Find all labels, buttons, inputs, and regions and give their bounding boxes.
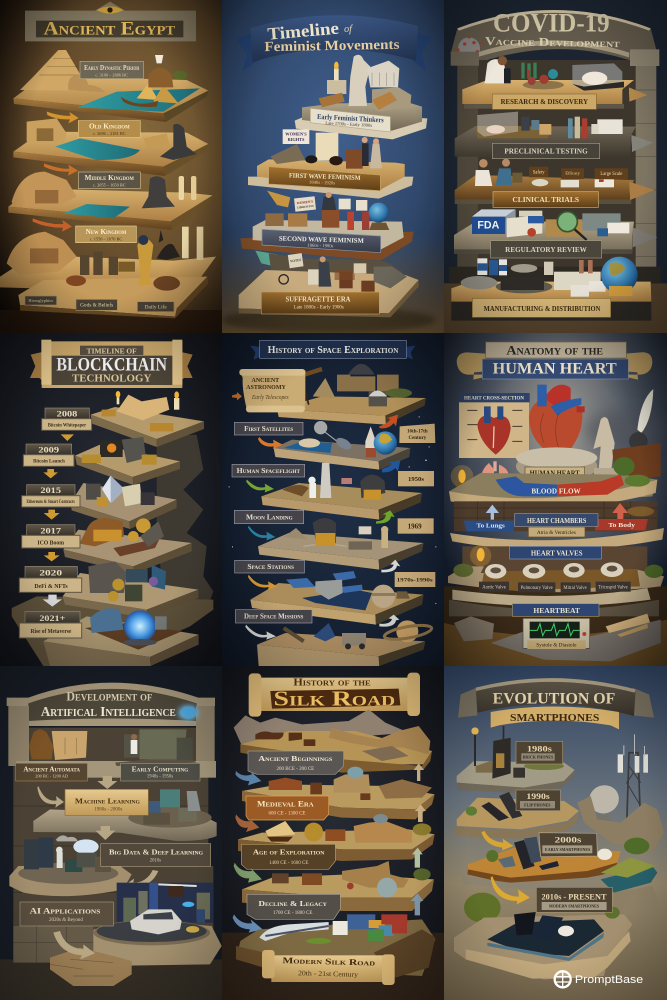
shelf: Regulatory Review: FDA bbox=[477, 220, 500, 232]
tier: Early Dynastic Period bbox=[13, 50, 208, 122]
tier: AI Applications bbox=[13, 883, 222, 986]
label: Research & Discovery bbox=[492, 94, 596, 109]
label: Moon Landing: Moon Landing bbox=[246, 512, 293, 521]
plate: Second Wave Feminism: SECOND WAVE FEMINISM bbox=[279, 236, 365, 245]
plate: Suffragette Era: Late 1800s - Early 1900s bbox=[294, 306, 344, 311]
label: AI Applications: 2020s & Beyond bbox=[49, 918, 83, 923]
label: Daily Life: Daily Life bbox=[145, 304, 167, 311]
label: 1990s Flip Phones: 1990s bbox=[526, 792, 551, 801]
plaque: New Kingdom bbox=[76, 226, 136, 243]
label: Age of Exploration bbox=[241, 844, 335, 869]
tier: Machine Learning bbox=[33, 789, 217, 841]
tier: 2020 DeFi & NFTs bbox=[63, 561, 198, 618]
tier: 2010s to present bbox=[454, 907, 632, 979]
tier: 2015 Ethereum bbox=[71, 476, 177, 529]
label: 1980s Brick Phones: 1980s bbox=[527, 743, 553, 753]
tier: Middle Kingdom bbox=[8, 172, 213, 230]
milestone: 2021+: Rise of Metaverse bbox=[31, 629, 72, 635]
scroll: Machine Learning bbox=[65, 789, 148, 815]
title ribbon: Feminist Movements bbox=[264, 38, 400, 55]
tag: 1969 bbox=[398, 518, 434, 534]
tier: Ancient Beginnings bbox=[234, 709, 432, 773]
arrow: blue curve 1 bbox=[235, 771, 261, 785]
plaque: Early Dynastic Period: Early Dynastic Period bbox=[84, 63, 139, 72]
monitor: heartbeat bbox=[523, 618, 590, 649]
title banner: BLOCKCHAIN bbox=[56, 354, 167, 375]
icon: heart bbox=[529, 385, 585, 459]
sign: votes for women bbox=[288, 253, 304, 268]
label: Space Stations bbox=[235, 560, 304, 573]
ribbon: To Lungs: To Lungs bbox=[476, 523, 505, 530]
arrows: gold curved bbox=[481, 831, 530, 904]
milestone: 2009: Bitcoin Launch bbox=[33, 459, 65, 464]
plaque: Old Kingdom: Old Kingdom bbox=[89, 122, 130, 131]
label: Mitral Valve: Mitral Valve bbox=[563, 586, 587, 591]
rocks right bbox=[614, 886, 659, 914]
title ribbon bbox=[235, 15, 432, 72]
label: Big Data & Deep Learning: 2010s bbox=[150, 858, 161, 863]
tier: Early Feminist Thinkers bbox=[295, 55, 427, 139]
label: Heart Valves bbox=[510, 546, 601, 559]
arrow: white right 1 bbox=[381, 560, 400, 572]
pedestal: Human Heart bbox=[516, 447, 597, 481]
arch title: Development of bbox=[66, 690, 153, 704]
plate: Suffragette Era bbox=[261, 292, 379, 314]
arrow: orange curve bbox=[258, 437, 283, 449]
label: Pulmonary Valve bbox=[518, 582, 555, 592]
arrow: tan right 2 bbox=[629, 182, 655, 200]
label: Heart Valves: HEART VALVES bbox=[531, 550, 583, 558]
milestone: 2020 bbox=[19, 566, 82, 592]
tier: First Wave Feminism bbox=[248, 129, 413, 199]
label: Early Computing: Early Computing bbox=[132, 765, 188, 773]
arrow: grey right 1 bbox=[631, 135, 653, 152]
label: Tricuspid Valve bbox=[596, 582, 631, 592]
milestone: 2015: Ethereum & Smart Contracts bbox=[26, 500, 75, 505]
milestone: 2021+ bbox=[19, 611, 82, 638]
plaque: Middle Kingdom: Middle Kingdom bbox=[85, 173, 134, 182]
scroll: ancient astronomy: ASTRONOMY bbox=[246, 385, 286, 391]
plate: Suffragette Era: SUFFRAGETTE ERA bbox=[286, 296, 350, 304]
arrow: white curve bbox=[245, 625, 276, 640]
title: Evolution of Smartphones: SMARTPHONES bbox=[510, 713, 600, 724]
label: Human Spaceflight: Human Spaceflight bbox=[237, 466, 301, 475]
arrow: grey right 2 bbox=[633, 227, 657, 247]
tier: 2017 ICO Boom bbox=[63, 518, 192, 574]
arrow: 2015 to 2017 bbox=[44, 510, 60, 520]
scroll: Modern Silk Road bbox=[262, 950, 395, 985]
bottom slab base bbox=[12, 596, 213, 666]
arch title: COVID-19 Vaccine Development: COVID-19 bbox=[493, 8, 610, 37]
lungs bbox=[481, 461, 510, 483]
tag: 1950s: 1950s bbox=[408, 476, 424, 483]
tier: Blood Flow: BLOOD FLOW bbox=[531, 487, 581, 496]
label: Heartbeat: HEARTBEAT bbox=[533, 607, 580, 615]
panel: COVID-19 Vaccine Development bbox=[444, 0, 667, 333]
milestone: 2008: Bitcoin Whitepaper bbox=[48, 423, 87, 428]
arrow: orange bbox=[44, 163, 78, 176]
tier: 2009 Bitcoin Launch bbox=[75, 437, 180, 485]
label: Clinical Trials bbox=[493, 192, 598, 207]
panel: History of the Silk Road bbox=[222, 666, 444, 1000]
label: Mitral Valve bbox=[561, 582, 591, 592]
label: Hieroglyphics: Hieroglyphics bbox=[28, 298, 53, 303]
rocks and scrolls bbox=[454, 614, 661, 661]
plate: Second Wave Feminism bbox=[262, 229, 381, 253]
shelf: Clinical Trials: Safety bbox=[533, 170, 545, 175]
ledge: automata and computing bbox=[16, 729, 216, 778]
shelf: Preclinical Testing bbox=[455, 112, 636, 157]
label: First Satellites: First Satellites bbox=[244, 424, 293, 433]
title: Evolution of Smartphones: EVOLUTION OF bbox=[493, 690, 615, 707]
title banner: TECHNOLOGY bbox=[72, 374, 152, 385]
shelf: Clinical Trials: Large Scale bbox=[600, 172, 622, 177]
arrow: green right bbox=[376, 510, 395, 524]
label: Manufacturing & Distribution bbox=[472, 298, 611, 317]
arrow: teal curve bbox=[248, 526, 275, 540]
tier: New Kingdom bbox=[0, 227, 216, 318]
label: Medieval Era: 600 CE - 1300 CE bbox=[269, 811, 305, 816]
arrow: 2009 to 2015 bbox=[43, 469, 58, 478]
label: Heart Chambers: HEART CHAMBERS bbox=[527, 517, 586, 525]
label: 1980s Brick Phones: BRICK PHONES bbox=[523, 755, 554, 760]
tier: space stations bbox=[250, 571, 424, 625]
arrow: 2008 to 2009 bbox=[61, 434, 74, 441]
tag: 1970s-1990s bbox=[395, 572, 435, 587]
milestone: 2009: 2009 bbox=[38, 444, 60, 454]
tier: Medieval Era bbox=[242, 767, 435, 819]
logo: PromptBase bbox=[555, 971, 643, 987]
tier: moon landing bbox=[258, 518, 424, 570]
milestone: 2009 bbox=[23, 444, 74, 466]
plaque: New Kingdom: New Kingdom bbox=[86, 227, 127, 236]
tier: first satellites bbox=[274, 421, 410, 470]
title banner bbox=[30, 340, 193, 388]
panel: Anatomy of the Human Heart bbox=[444, 333, 667, 666]
ribbon: To Body: To Body bbox=[608, 522, 636, 529]
title plaque: Ancient Egypt: Ancient Egypt bbox=[44, 19, 176, 40]
tier: 2021+ Rise of Metaverse bbox=[43, 608, 199, 666]
title: Evolution of Smartphones bbox=[458, 678, 654, 729]
cross-section chart bbox=[459, 393, 530, 458]
tag: 16th-17th Century: 16th-17th bbox=[407, 429, 428, 434]
tier: deep space missions bbox=[257, 620, 433, 666]
label: Preclinical Testing: PRECLINICAL TESTING bbox=[504, 146, 588, 155]
arrow: first wave down bbox=[267, 191, 290, 207]
title: Anatomy of the Human Heart bbox=[457, 342, 652, 380]
panel: Timeline of Blockchain Technology bbox=[0, 333, 222, 666]
tier: 2008 Bitcoin Whitepaper bbox=[91, 391, 204, 447]
label: 2010s - Present Modern Smartphones: MODERN SMARTPHONES bbox=[549, 904, 600, 909]
cross-section chart: HEART CROSS-SECTION bbox=[464, 397, 525, 402]
scroll: Modern Silk Road: 20th - 21st Century bbox=[298, 969, 359, 979]
arrows: tall up arrows bbox=[411, 763, 426, 915]
label: Pulmonary Valve: Pulmonary Valve bbox=[521, 586, 553, 591]
label: Ancient Automata: 200 BC - 1200 AD bbox=[35, 774, 68, 779]
label: Deep Space Missions bbox=[235, 610, 312, 623]
plate: Early Feminist Thinkers: Early Feminist Thinkers bbox=[317, 112, 384, 124]
tier: Decline & Legacy bbox=[242, 861, 434, 911]
label: Human Spaceflight bbox=[232, 464, 305, 477]
label: 1990s Flip Phones bbox=[516, 790, 560, 811]
milestone: 2017: 2017 bbox=[40, 525, 62, 535]
label: Ancient Beginnings: 200 BCE - 200 CE bbox=[276, 767, 314, 772]
tier: Old Kingdom bbox=[13, 118, 208, 176]
cell tower and dish bbox=[577, 734, 664, 853]
plaque: Middle Kingdom bbox=[78, 172, 140, 189]
label: Deep Space Missions: Deep Space Missions bbox=[244, 612, 304, 621]
milestone: 2021+: 2021+ bbox=[39, 613, 65, 623]
scroll: Machine Learning: 1980s - 2000s bbox=[94, 808, 122, 813]
milestone: 2017: ICO Boom bbox=[37, 539, 64, 546]
ribbon: To Lungs bbox=[463, 521, 514, 531]
logo: PromptBase: PromptBase bbox=[575, 974, 643, 986]
label: First Satellites bbox=[234, 422, 303, 435]
shelf: Manufacturing & Distribution bbox=[451, 257, 651, 321]
sign: Women's Rights bbox=[283, 129, 309, 144]
label: Ancient Automata bbox=[16, 763, 87, 781]
title scroll: Silk Road bbox=[274, 686, 395, 710]
title banner: TIMELINE OF bbox=[87, 346, 137, 355]
title plaque: Ancient Egypt bbox=[25, 2, 196, 41]
label: Daily Life bbox=[137, 302, 174, 312]
plate: First Wave Feminism: FIRST WAVE FEMINISM bbox=[289, 172, 361, 182]
stone wall backing bbox=[13, 728, 213, 959]
candle left bbox=[451, 465, 473, 488]
label: Big Data & Deep Learning: Big Data & Deep Learning bbox=[109, 847, 203, 856]
plate: First Wave Feminism bbox=[269, 167, 380, 191]
title banner: History of Space Exploration bbox=[268, 345, 398, 356]
milestone: 2020: 2020 bbox=[39, 568, 62, 578]
tier: Second Wave Feminism bbox=[240, 192, 414, 261]
tag: 16th-17th Century bbox=[399, 424, 435, 443]
arch title: COVID-19 Vaccine Development: Vaccine Development bbox=[485, 34, 621, 50]
plate: Second Wave Feminism: 1960s - 1980s bbox=[307, 244, 334, 249]
shelf: Research & Discovery bbox=[462, 56, 634, 109]
tier: Modern Silk Road bbox=[236, 914, 435, 978]
label: Regulatory Review: REGULATORY REVIEW bbox=[505, 245, 587, 254]
label: Big Data & Deep Learning bbox=[101, 844, 211, 866]
milestone: 2015: 2015 bbox=[40, 485, 62, 495]
milestone: 2020: DeFi & NFTs bbox=[34, 583, 68, 590]
arrow: down 2 bbox=[95, 826, 115, 840]
pedestal: Human Heart: HUMAN HEART bbox=[530, 470, 580, 478]
label: 2000s Early Smartphones bbox=[539, 833, 597, 857]
label: 1990s Flip Phones: FLIP PHONES bbox=[524, 802, 551, 807]
tier: Heart Chambers bbox=[450, 501, 664, 550]
scroll: Machine Learning: Machine Learning bbox=[75, 796, 140, 805]
arch title: COVID-19 Vaccine Development bbox=[451, 8, 657, 63]
label: Decline & Legacy: Decline & Legacy bbox=[259, 899, 327, 908]
ribbon: To Body bbox=[595, 519, 648, 530]
panel: Ancient Egypt bbox=[0, 0, 222, 333]
arrow: orange curve bbox=[235, 814, 259, 832]
label: Decline & Legacy: 1700 CE - 1800 CE bbox=[273, 911, 312, 916]
arrow: yellow curve bbox=[248, 575, 277, 590]
label: Regulatory Review bbox=[491, 241, 602, 258]
sign: Women's Liberation bbox=[294, 196, 316, 212]
title ribbon: Timeline bbox=[267, 19, 340, 44]
shelf: Regulatory Review bbox=[454, 209, 634, 254]
arrow: white right 2 bbox=[379, 615, 399, 627]
label: Hieroglyphics bbox=[25, 296, 57, 305]
label: Gods & Beliefs: Gods & Beliefs bbox=[80, 302, 113, 309]
arrow: small orange bbox=[232, 392, 242, 400]
label: 2010s - Present Modern Smartphones: 2010s - PRESENT bbox=[542, 891, 607, 901]
scroll: ancient astronomy bbox=[239, 369, 305, 412]
label: Early Computing: 1940s - 1950s bbox=[147, 775, 173, 780]
scroll: ancient astronomy: Early Telescopes bbox=[251, 394, 289, 401]
milestone: 2008 bbox=[42, 408, 92, 430]
right stone stack bbox=[157, 435, 213, 623]
arrow: red orange bbox=[33, 218, 72, 232]
panel: Development of Artificial Intelligence bbox=[0, 682, 222, 1000]
panel: Evolution of Smartphones bbox=[444, 666, 667, 1000]
icon: tree bbox=[464, 893, 501, 929]
label: Age of Exploration: 1400 CE - 1600 CE bbox=[269, 861, 308, 866]
plate: Early Feminist Thinkers bbox=[310, 108, 390, 132]
arrow: blue curve 2 bbox=[233, 914, 263, 933]
label: Moon Landing bbox=[234, 510, 304, 524]
label: Ancient Beginnings bbox=[248, 751, 344, 774]
tier: Big Data bbox=[9, 835, 132, 896]
plaque: Middle Kingdom: c. 2055 – 1650 BC bbox=[93, 183, 126, 188]
label: Clinical Trials: CLINICAL TRIALS bbox=[512, 195, 579, 204]
arrow: curved down left bbox=[125, 870, 158, 890]
label: 2000s Early Smartphones: 2000s bbox=[555, 836, 582, 845]
sign: votes for women: VOTES bbox=[290, 258, 302, 263]
label: Medieval Era: Medieval Era bbox=[257, 800, 314, 809]
tag: 1950s bbox=[398, 471, 434, 486]
sign: Women's Liberation: LIBERATION bbox=[297, 205, 314, 210]
arrow: 2017 to 2020 bbox=[44, 552, 60, 561]
label: Gods & Beliefs bbox=[76, 299, 117, 310]
label: 2000s Early Smartphones: EARLY SMARTPHONES bbox=[545, 847, 591, 852]
label: Ancient Automata: Ancient Automata bbox=[23, 765, 80, 773]
arrow: green curve bbox=[246, 480, 274, 492]
sign: Women's Rights: RIGHTS bbox=[288, 137, 305, 142]
tier: human spaceflight bbox=[261, 463, 422, 520]
arrow: blue bbox=[382, 460, 400, 472]
arrow: tan right 1 bbox=[629, 87, 647, 102]
shelf: Clinical Trials: Efficacy bbox=[565, 171, 581, 176]
monitor: heartbeat: Systole & Diastole bbox=[536, 643, 577, 649]
label: Manufacturing & Distribution: MANUFACTURING & DISTRIBUTION bbox=[484, 304, 601, 313]
tier: Suffragette Era bbox=[239, 251, 419, 317]
statue and inkwell bbox=[593, 389, 661, 480]
tag: 16th-17th Century: Century bbox=[408, 436, 427, 441]
label: Ancient Beginnings: Ancient Beginnings bbox=[258, 754, 333, 763]
tier: 1990s bbox=[455, 792, 579, 839]
label: Medieval Era bbox=[246, 796, 329, 820]
scroll: ancient astronomy: ANCIENT bbox=[251, 378, 279, 384]
plaque: Old Kingdom bbox=[78, 121, 140, 137]
milestone: 2008: 2008 bbox=[57, 408, 78, 418]
plaque: Early Dynastic Period: c. 3100 – 2686 BC bbox=[95, 73, 128, 78]
label: Tricuspid Valve: Tricuspid Valve bbox=[598, 585, 628, 590]
arrow: curved left bbox=[37, 786, 64, 808]
title: Anatomy of the Human Heart: Anatomy of the bbox=[506, 344, 603, 358]
arch title bbox=[7, 683, 215, 766]
label: Heart Chambers bbox=[515, 514, 598, 526]
label: Heartbeat bbox=[512, 604, 599, 616]
label: AI Applications bbox=[20, 902, 113, 926]
tag: 1970s-1990s: 1970s-1990s bbox=[397, 578, 434, 584]
arrow: down 1 bbox=[97, 776, 117, 789]
tier: ancient astronomy bbox=[277, 364, 426, 425]
label: 2010s - Present Modern Smartphones bbox=[536, 887, 612, 912]
title scroll bbox=[249, 673, 420, 717]
title banner bbox=[250, 340, 415, 360]
icon: virus bbox=[456, 36, 483, 59]
label: Aortic Valve: Aortic Valve bbox=[482, 585, 506, 590]
tier: Age of Exploration bbox=[238, 814, 435, 861]
plaque: Early Dynastic Period bbox=[80, 61, 143, 79]
sign: Women's Liberation: WOMEN'S bbox=[296, 199, 313, 205]
label: Atria & Ventricles: Atria & Ventricles bbox=[537, 530, 576, 536]
title: Anatomy of the Human Heart: HUMAN HEART bbox=[493, 361, 617, 378]
title ribbon: of bbox=[344, 24, 353, 35]
label: 1980s Brick Phones bbox=[516, 741, 563, 764]
scroll: Modern Silk Road: Modern Silk Road bbox=[282, 955, 376, 968]
plaque: Old Kingdom: c. 2686 – 2181 BC bbox=[93, 131, 126, 136]
tier: Heart Valves bbox=[448, 545, 664, 616]
sign: Women's Rights: WOMEN'S bbox=[285, 131, 307, 136]
arrow: orange top right bbox=[379, 415, 398, 428]
title scroll: History of the bbox=[293, 677, 371, 688]
label: Atria & Ventricles bbox=[528, 527, 585, 537]
label: Age of Exploration: Age of Exploration bbox=[253, 848, 325, 857]
label: Space Stations: Space Stations bbox=[247, 562, 294, 571]
label: Decline & Legacy bbox=[247, 894, 340, 919]
label: Early Computing bbox=[121, 763, 200, 781]
tier: Blood Flow bbox=[449, 457, 657, 509]
label: AI Applications: AI Applications bbox=[30, 906, 101, 915]
stone pillars and wall bbox=[449, 49, 661, 283]
milestone: 2017 bbox=[22, 525, 80, 548]
tier: 1980s bbox=[457, 726, 575, 793]
arrow: gold bbox=[47, 112, 79, 123]
plaque: New Kingdom: c. 1550 – 1070 BC bbox=[90, 236, 122, 241]
arrow: 2020 to 2021+ bbox=[43, 595, 62, 607]
arrow: green curve bbox=[234, 863, 262, 883]
panel: Timeline of Feminist Movements bbox=[222, 0, 444, 333]
arrow: curved down right bbox=[53, 931, 95, 959]
plate: First Wave Feminism: 1840s - 1920s bbox=[309, 181, 335, 186]
shelf: Clinical Trials bbox=[455, 159, 634, 204]
tier: 2000s bbox=[461, 837, 657, 893]
panel: History of Space Exploration bbox=[222, 333, 444, 666]
label: Aortic Valve bbox=[479, 582, 509, 592]
label: Preclinical Testing bbox=[492, 143, 600, 159]
tag: 1969: 1969 bbox=[408, 522, 422, 530]
milestone: 2015 bbox=[22, 485, 80, 507]
plate: Early Feminist Thinkers: Late 1700s - Early 1800s bbox=[325, 121, 372, 129]
icon: glowing brain gem bbox=[178, 705, 198, 720]
arch title: Artifical Intelligence bbox=[41, 704, 176, 719]
label: Research & Discovery: RESEARCH & DISCOVERY bbox=[501, 97, 589, 106]
